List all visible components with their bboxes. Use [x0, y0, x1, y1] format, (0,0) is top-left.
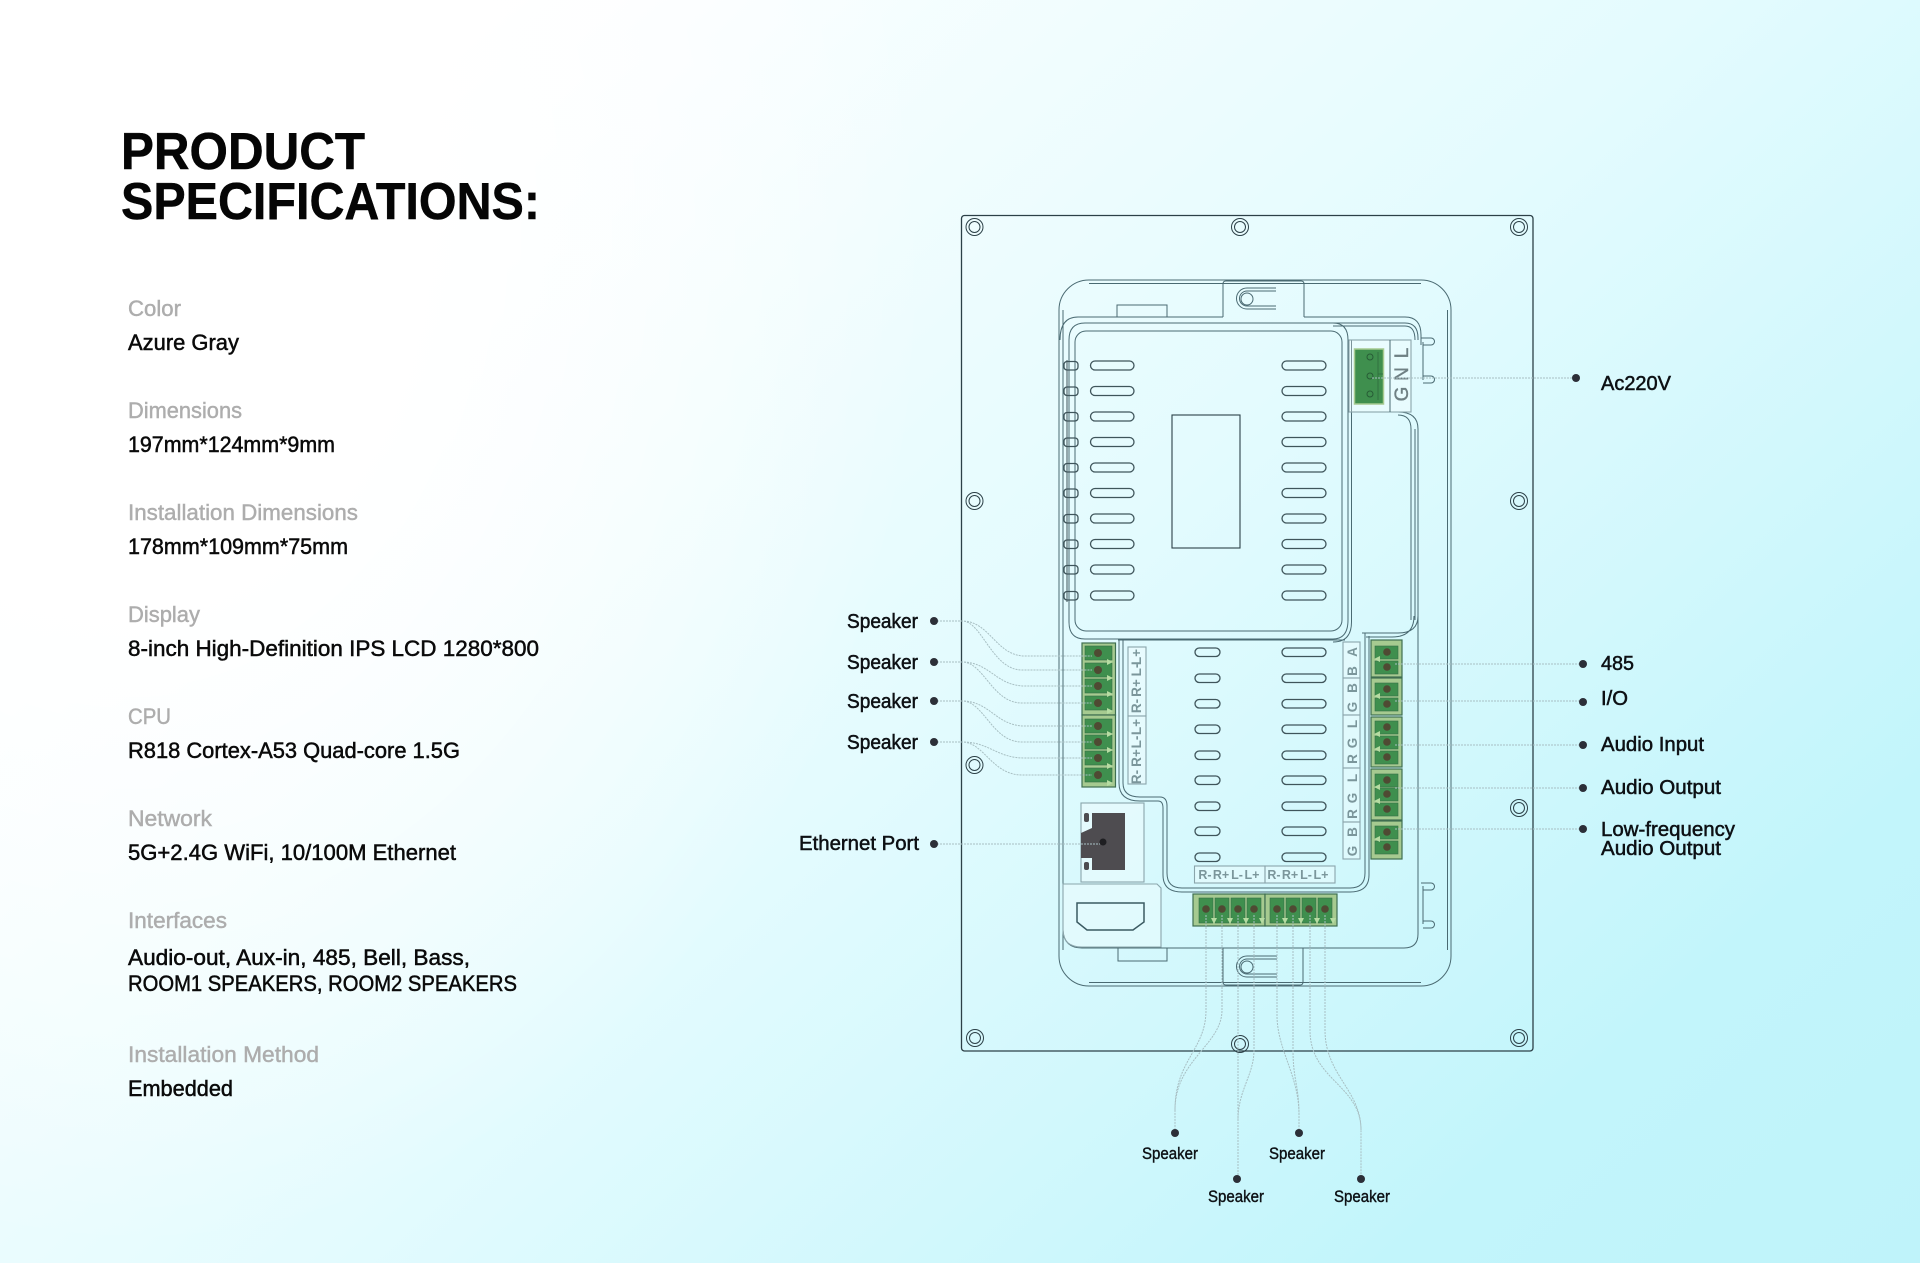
right terminal label strip: G	[1345, 738, 1360, 748]
callout: Speaker bottom 4	[1310, 915, 1390, 1206]
callout: Ac220V	[1372, 373, 1672, 395]
callout: Audio Input	[1395, 734, 1704, 756]
bottom green speaker terminals	[1193, 894, 1337, 926]
upper vent slots	[1090, 361, 1326, 600]
HDMI port	[1063, 884, 1161, 947]
right terminal label strip: R	[1345, 809, 1360, 819]
right terminal label strip: R	[1345, 754, 1360, 764]
right side pins	[1421, 338, 1434, 928]
spec: interfaces: Interfaces	[128, 908, 227, 933]
left speaker terminal label strip: R+	[1129, 749, 1144, 767]
callout: I/O	[1395, 688, 1628, 710]
right terminal label strip: G	[1345, 793, 1360, 803]
bottom speaker terminal label strip: L-	[1300, 868, 1312, 882]
left speaker terminal label strip: L+	[1129, 649, 1144, 665]
callout: Speaker bottom 4: Speaker	[1334, 1188, 1390, 1206]
callout: Speaker left 4	[847, 732, 1092, 775]
left speaker terminal label strip: L-	[1129, 736, 1144, 748]
callout: Ethernet Port	[799, 833, 1100, 855]
callout: 485: 485	[1601, 653, 1634, 675]
left speaker terminal label strip: R+	[1129, 679, 1144, 697]
side tabs on left edge	[1064, 360, 1078, 602]
spec: display	[128, 602, 539, 661]
centre label rectangle	[1172, 415, 1240, 548]
callout: Speaker left 3: Speaker	[847, 691, 918, 713]
spec: installation method: Installation Method	[128, 1042, 319, 1067]
right terminal label strip: L	[1345, 774, 1360, 782]
spec: cpu	[128, 704, 460, 763]
title	[121, 123, 540, 231]
spec: dimensions	[128, 398, 335, 457]
left speaker terminal label strip: R-	[1129, 699, 1144, 713]
lower vent slots	[1195, 648, 1326, 862]
left green speaker terminals	[1082, 643, 1116, 787]
callout: Low-frequency Audio Output: Low-frequency	[1601, 819, 1735, 841]
left speaker terminal label strip: L+	[1129, 719, 1144, 735]
title: SPECIFICATIONS:	[121, 173, 540, 231]
callout: 485	[1395, 653, 1634, 675]
AC terminal block: G	[1392, 387, 1413, 401]
right terminal label strip: B	[1345, 683, 1360, 693]
spec: cpu: CPU	[128, 704, 171, 729]
ethernet port	[1081, 803, 1144, 882]
AC terminal block: N	[1392, 367, 1413, 381]
callout: I/O: I/O	[1601, 688, 1628, 710]
spec: interfaces: ROOM1 SPEAKERS, ROOM2 SPEAKERS	[128, 971, 517, 996]
right terminal label strip: G	[1345, 846, 1360, 856]
callout: Speaker left 1: Speaker	[847, 611, 918, 633]
spec: interfaces: Audio-out, Aux-in, 485, Bell, Bass,	[128, 945, 470, 970]
panel: specification list	[128, 296, 539, 1101]
callout: Low-frequency Audio Output	[1395, 819, 1735, 860]
diagram: housing frames	[1059, 280, 1451, 986]
spec: display: 8-inch High-Definition IPS LCD 1280*800	[128, 636, 539, 661]
right terminal label strip: A	[1345, 647, 1360, 657]
mounting screw holes	[966, 218, 1528, 1052]
callout: Low-frequency Audio Output: Audio Output	[1601, 838, 1721, 860]
bottom mounting bracket	[1118, 948, 1303, 985]
right terminal label strip	[1343, 642, 1360, 859]
spec: dimensions: Dimensions	[128, 398, 242, 423]
spec: installation dimensions: Installation Dimensions	[128, 500, 358, 525]
spec: installation dimensions	[128, 500, 358, 559]
callout: Speaker left 4: Speaker	[847, 732, 918, 754]
bottom speaker terminal label strip: R-	[1267, 868, 1281, 882]
callout: Speaker bottom 3: Speaker	[1269, 1145, 1325, 1163]
callout: Audio Input: Audio Input	[1601, 734, 1704, 756]
callout: Ac220V: Ac220V	[1601, 373, 1672, 395]
title: PRODUCT	[121, 123, 365, 181]
callout: Speaker bottom 2	[1208, 915, 1264, 1206]
right terminal label strip: G	[1345, 702, 1360, 712]
spec: dimensions: 197mm*124mm*9mm	[128, 432, 335, 457]
left speaker terminal label strip: R-	[1129, 770, 1144, 784]
spec: installation dimensions: 178mm*109mm*75mm	[128, 534, 348, 559]
spec: network: Network	[128, 806, 213, 831]
right terminal label strip: B	[1345, 666, 1360, 676]
bottom speaker terminal label strip: L+	[1245, 868, 1259, 882]
bottom speaker terminal label strip: L-	[1231, 868, 1243, 882]
callout: Speaker left 3	[847, 691, 1092, 742]
spec: interfaces	[128, 908, 517, 996]
callout: Speaker bottom 3	[1269, 915, 1325, 1163]
spec: network	[128, 806, 456, 865]
right terminal label strip: B	[1345, 827, 1360, 837]
spec: color: Color	[128, 296, 181, 321]
diagram: back panel outline	[962, 216, 1533, 1052]
callout: Speaker left 1	[847, 611, 1092, 670]
AC terminal block: L	[1392, 348, 1413, 358]
callout: Speaker left 2	[847, 652, 1092, 703]
callout: Speaker bottom 1	[1142, 915, 1222, 1163]
spec: color	[128, 296, 239, 355]
AC terminal block	[1349, 340, 1413, 412]
callout: Speaker bottom 1: Speaker	[1142, 1145, 1198, 1163]
right terminal label strip: L	[1345, 720, 1360, 728]
spec: color: Azure Gray	[128, 330, 239, 355]
bottom speaker terminal label strip: R-	[1198, 868, 1212, 882]
bottom speaker terminal label strip: R+	[1282, 868, 1298, 882]
callout: Speaker bottom 2: Speaker	[1208, 1188, 1264, 1206]
left speaker terminal label strip: L-	[1129, 664, 1144, 676]
callout: Speaker left 2: Speaker	[847, 652, 918, 674]
bottom speaker terminal label strip: L+	[1314, 868, 1328, 882]
spec: installation method: Embedded	[128, 1076, 233, 1101]
callout: Audio Output: Audio Output	[1601, 777, 1721, 799]
bottom speaker terminal label strip	[1194, 866, 1335, 883]
bottom speaker terminal label strip: R+	[1213, 868, 1229, 882]
spec: installation method	[128, 1042, 319, 1101]
spec: cpu: R818 Cortex-A53 Quad-core 1.5G	[128, 738, 460, 763]
callout: Ethernet Port: Ethernet Port	[799, 833, 919, 855]
callout: Audio Output	[1395, 777, 1721, 799]
right green terminals	[1371, 640, 1402, 859]
top mounting bracket	[1117, 281, 1304, 317]
left speaker terminal label strip	[1128, 647, 1146, 784]
spec: network: 5G+2.4G WiFi, 10/100M Ethernet	[128, 840, 456, 865]
spec: display: Display	[128, 602, 200, 627]
